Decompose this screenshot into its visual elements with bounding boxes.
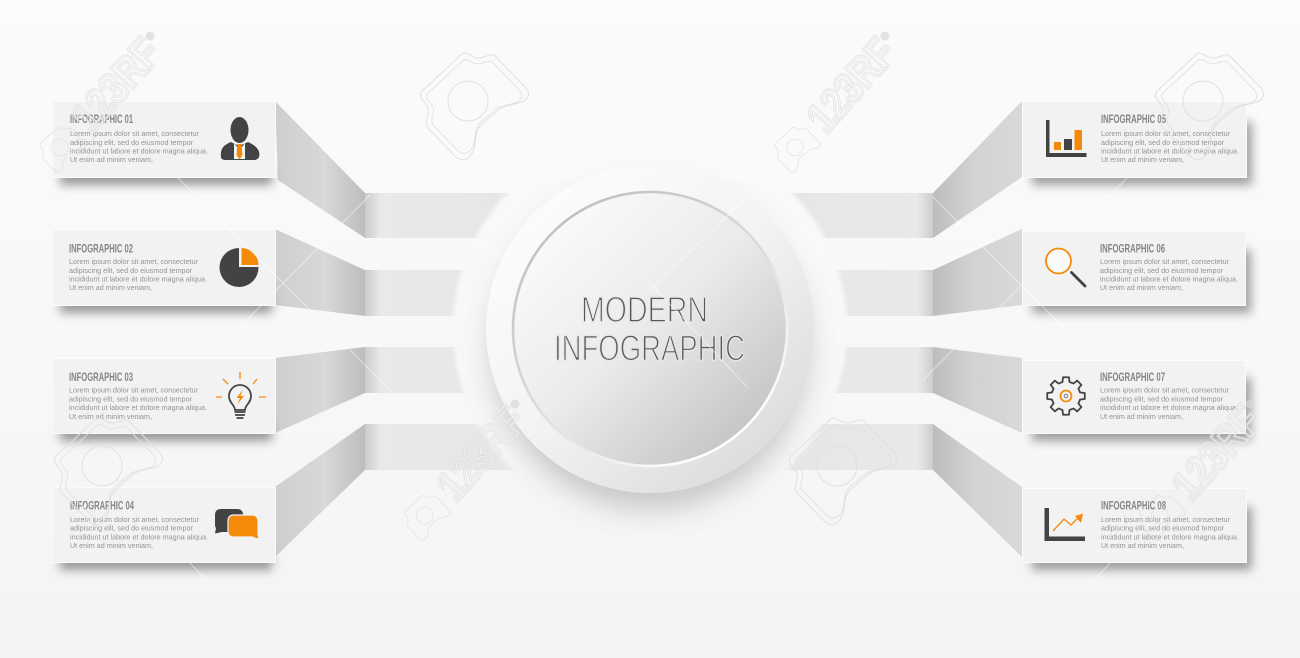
card 03: Lorem ipsum dolor sit amet, consectetur [69,386,198,394]
central medallion [453,132,847,526]
small camera marks [40,127,1185,540]
card 05 [1022,102,1252,185]
card 01 [52,102,276,185]
halo ring [453,132,847,526]
card 04: Lorem ipsum dolor sit amet, consectetur [70,515,199,524]
card 07 [1022,360,1251,441]
card 07: incididunt ut labore et dolore magna aliqua. [1100,403,1238,412]
card 05: incididunt ut labore et dolore magna aliqua. [1101,146,1239,156]
title: MODERN [581,289,708,330]
watermark: 123RF logos: 123RF [1163,397,1271,510]
card 07: Ut enim ad minim veniam, [1100,412,1183,421]
watermark lines [177,177,1127,590]
card 07: Lorem ipsum dolor sit amet, consectetur [1100,386,1229,394]
card 06: adipiscing elit, sed do eiusmod tempor [1100,266,1223,275]
card 08: Ut enim ad minim veniam, [1101,541,1184,550]
outer disc [486,165,814,493]
watermark: 123RF logos: 123RF [798,29,906,142]
card 08: INFOGRAPHIC 08 [1101,498,1166,512]
icon: gear [1047,377,1085,415]
icon: businessman [221,117,259,160]
card 05: Ut enim ad minim veniam, [1101,155,1184,164]
title: INFOGRAPHIC [554,328,745,368]
card 07: adipiscing elit, sed do eiusmod tempor [1100,394,1223,404]
watermark: 123RF logos: 123RF [63,29,171,142]
card 02: adipiscing elit, sed do eiusmod tempor [69,266,192,275]
card 04: adipiscing elit, sed do eiusmod tempor [70,524,193,532]
watermark: egg outlines [54,53,1263,525]
card 05: INFOGRAPHIC 05 [1101,112,1166,126]
watermark: 123RF logos [40,29,1271,540]
card 04: Ut enim ad minim veniam, [70,541,153,550]
card 08: incididunt ut labore et dolore magna aliqua. [1101,532,1239,542]
card 06: Ut enim ad minim veniam, [1100,283,1183,292]
card 03: Ut enim ad minim veniam, [69,412,152,421]
card 05: adipiscing elit, sed do eiusmod tempor [1101,138,1224,147]
card 04 [52,488,276,570]
watermark: 123RF logos: 123RF [1163,397,1271,510]
watermark: 123RF logos: 123RF [63,29,171,142]
icon: growth chart [1044,508,1085,541]
icon: pie chart [220,248,259,287]
card 06: INFOGRAPHIC 06 [1100,242,1165,256]
card 03: adipiscing elit, sed do eiusmod tempor [69,394,192,404]
card 06 [1022,232,1251,313]
card 02: Ut enim ad minim veniam, [69,283,152,292]
card 08: adipiscing elit, sed do eiusmod tempor [1101,524,1224,532]
inner face [513,192,787,466]
card 04: INFOGRAPHIC 04 [70,498,134,512]
title [554,289,745,368]
card 04: incididunt ut labore et dolore magna aliqua. [70,532,208,542]
card 01: incididunt ut labore et dolore magna aliqua. [70,146,208,156]
card 08: Lorem ipsum dolor sit amet, consectetur [1101,515,1230,524]
card 05: Lorem ipsum dolor sit amet, consectetur [1101,129,1230,138]
icon: magnifying glass [1046,248,1085,286]
card 03: INFOGRAPHIC 03 [69,370,133,384]
card 07: INFOGRAPHIC 07 [1100,370,1165,384]
card 03: incididunt ut labore et dolore magna aliqua. [69,403,207,412]
right connector ribbons [775,101,1022,557]
card 01: Lorem ipsum dolor sit amet, consectetur [70,129,199,138]
card 08 [1022,488,1252,570]
card 02: incididunt ut labore et dolore magna aliqua. [69,274,207,284]
card 01: adipiscing elit, sed do eiusmod tempor [70,138,193,147]
disc shadow [492,186,808,510]
watermark: 123RF logos: 123RF [428,397,536,510]
icon: bar chart [1046,120,1086,157]
card 06: incididunt ut labore et dolore magna aliqua. [1100,274,1238,284]
card 06: Lorem ipsum dolor sit amet, consectetur [1100,257,1229,266]
left connector ribbons [275,101,525,557]
card 01: Ut enim ad minim veniam, [70,155,153,164]
card 03 [52,358,276,441]
card 02: INFOGRAPHIC 02 [69,242,133,256]
card 01: INFOGRAPHIC 01 [70,112,133,126]
watermark: 123RF logos: 123RF [798,29,906,142]
card 02: Lorem ipsum dolor sit amet, consectetur [69,257,198,266]
icon: light bulb [216,372,266,418]
watermark: 123RF logos: 123RF [428,397,536,510]
icon: speech bubbles [215,509,259,540]
card 02 [52,230,276,313]
